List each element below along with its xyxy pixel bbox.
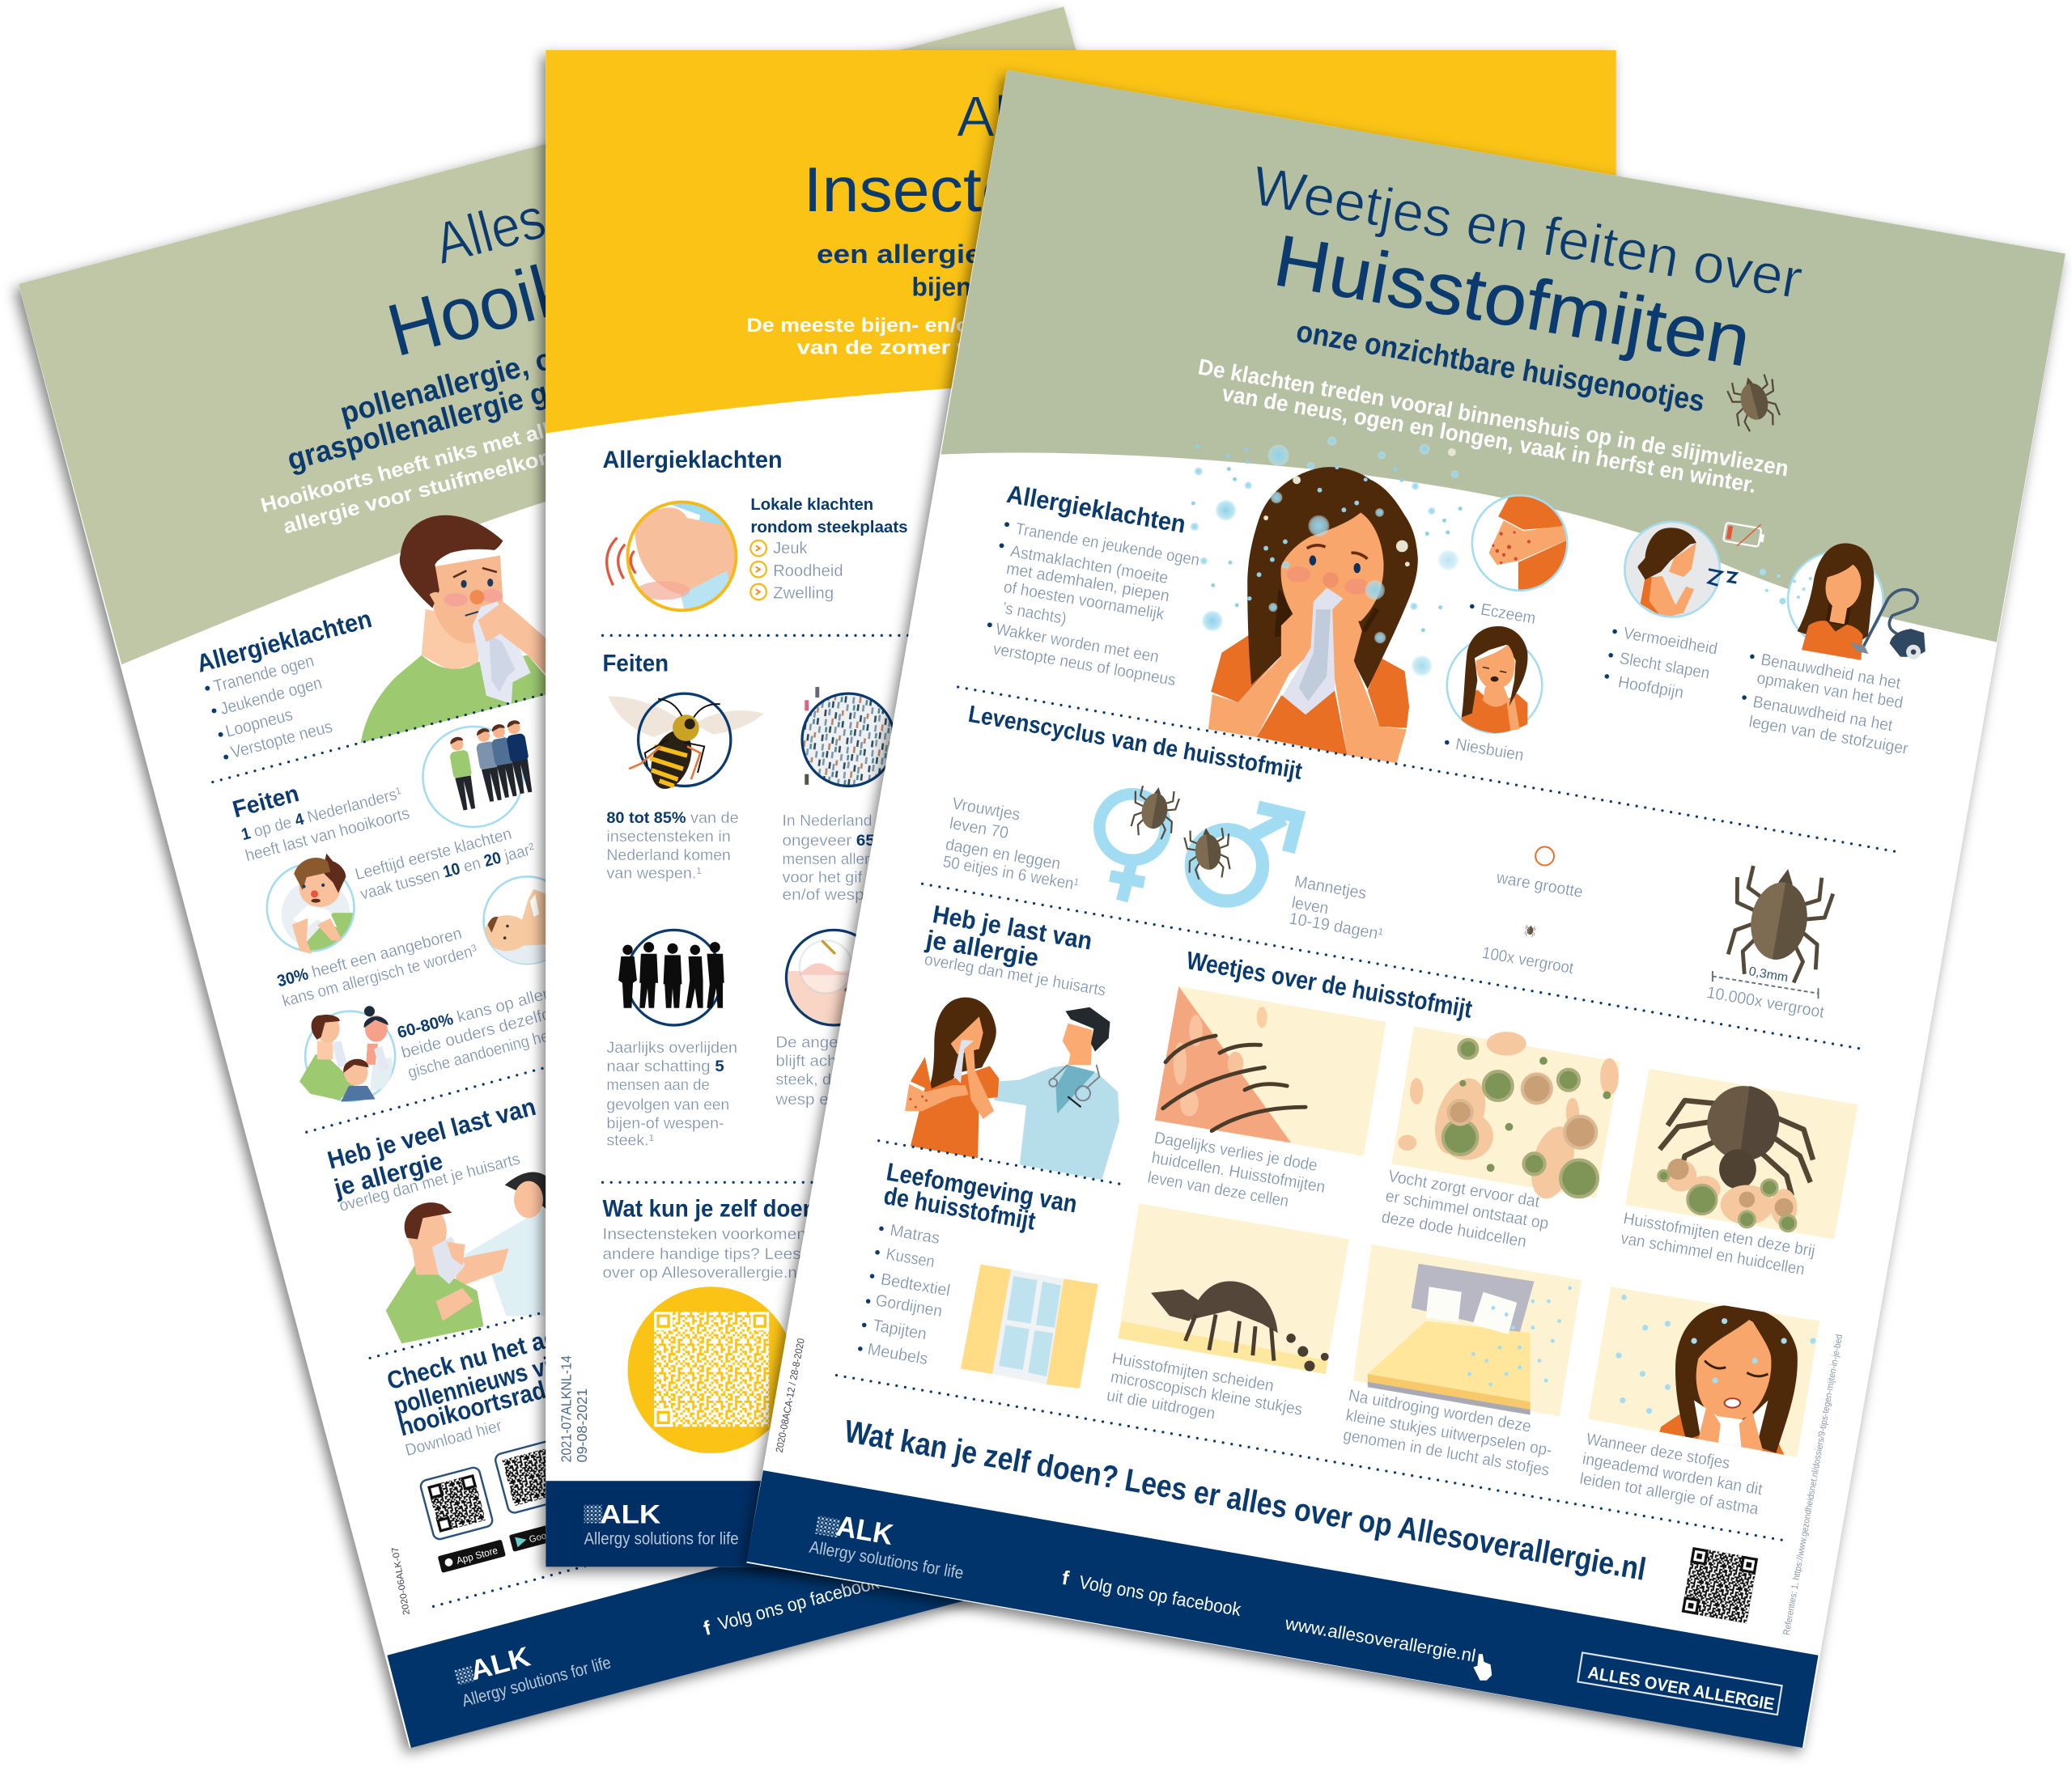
panel 5: bed (1353, 1244, 1582, 1416)
logo: ALK: Allergy solutions for life (808, 1538, 965, 1583)
call to action: Wat kan je zelf doen? Lees er alles over op Allesoverallergie.nl (842, 1414, 1649, 1588)
text: Jaarlijks overlijden: bijen-of wespen- (606, 1114, 724, 1132)
sage header with curved edge (940, 70, 2066, 642)
text: Jaarlijks overlijden: Jaarlijks overlijden (606, 1039, 737, 1057)
caption 3: Huisstofmijten eten deze brij (1622, 1210, 1816, 1261)
text: vrouwtjes: 50 eitjes in 6 weken¹ (941, 853, 1080, 894)
fact: 1 op de 4 (240, 719, 535, 865)
caption 5 (1342, 1387, 1553, 1480)
list: vermoeidheid: Hoofdpijn (1617, 673, 1685, 702)
heading: Weetjes over: Weetjes over de huisstofmijt (1184, 946, 1475, 1024)
icon: eczeem (1470, 494, 1569, 624)
size: 10.000x vergroot (1705, 861, 1836, 1022)
footer: facebook: f (701, 1617, 714, 1640)
heading: Check nu: Check nu het actuele (384, 1309, 611, 1395)
heading: Wat kun je zelf doen: Wat kun je zelf doen? (602, 1196, 830, 1223)
heading: Heb je last (923, 900, 1107, 1000)
heading: Heb je veel last: overleg dan met je huisarts (338, 1151, 522, 1215)
size: 100x vergroot: 100x vergroot (1480, 944, 1575, 977)
subtitle: een allergie voor het gif van (817, 239, 1213, 269)
heading: Leefomgeving: de huisstofmijt (881, 1181, 1038, 1236)
navy footer (746, 1470, 1819, 1748)
subtitle: pollenallergie, ook wel (337, 319, 642, 430)
poster sheet (546, 50, 1616, 1567)
text: Jaarlijks overlijden: naar schatting 5 (606, 1058, 724, 1075)
logo: ALK: ALK (600, 1499, 661, 1528)
fact: 60-80% (299, 973, 602, 1102)
fact: 60-80%: beide ouders dezelfde aller- (400, 992, 602, 1062)
text: vrouwtjes (941, 795, 1080, 894)
heading: Leefomgeving: Leefomgeving van (885, 1157, 1080, 1219)
text: Jaarlijks overlijden: mensen aan de (606, 1076, 710, 1094)
subtitle: bijen en wespen (912, 272, 1110, 302)
caption 6: leiden tot allergie of astma (1578, 1470, 1760, 1519)
list: benauwdheid: Benauwdheid na het (1760, 651, 1902, 693)
size: 100x vergroot (1480, 924, 1575, 977)
list: klachten: Tranende ogen (211, 651, 316, 696)
QR code (1682, 1547, 1758, 1623)
logo: ALK: Allergy solutions for life (460, 1653, 613, 1711)
list: benauwdheid: opmaken van het bed (1756, 669, 1904, 712)
icon: male symbol with mite (1184, 808, 1297, 901)
icon: vermoeidheid (1623, 520, 1736, 618)
list: vermoeidheid: Vermoeidheid (1622, 625, 1719, 659)
size: 10.000x vergroot: 0,3mm (1747, 965, 1789, 985)
icon: pointer hand (1473, 1654, 1492, 1681)
text: mannetjes: leven (1290, 894, 1330, 918)
caption 1 (1146, 1130, 1327, 1210)
icon: mite in title (1726, 371, 1784, 435)
text: mannetjes: 10-19 dagen¹ (1288, 909, 1385, 943)
fact: 60-80%: gische aandoening hebben (406, 1019, 583, 1082)
icon: five silhouettes (618, 930, 724, 1025)
badge: App Store (438, 1540, 506, 1573)
list: klachten: Astmaklachten (moeite (1008, 543, 1170, 587)
fact: 30% (277, 876, 546, 1007)
title (1248, 154, 1807, 382)
heading: Feiten: Feiten (602, 650, 669, 676)
QR code: app store (419, 1466, 494, 1541)
fact: leeftijd: vaak tussen 10 en 20 jaar² (359, 840, 537, 904)
navy footer band (387, 1378, 1455, 1748)
print code (558, 1355, 590, 1462)
panel: poster Hooikoorts (back) (7, 5, 1080, 1761)
text: Jaarlijks overlijden: steek.¹ (606, 1132, 655, 1150)
text: In Nederland (783, 812, 875, 904)
icon: niesbuien (1445, 626, 1542, 765)
caption 4: microscopisch kleine stukjes (1110, 1368, 1304, 1419)
list: lokale klachten (750, 496, 908, 603)
text: Insectensteken: andere handige tips? Lees er (602, 1245, 821, 1263)
footer: facebook: f (1060, 1567, 1071, 1590)
text: In Nederland: voor het gif v (783, 869, 875, 887)
text: De angel: steek, d (775, 1071, 831, 1088)
list: vermoeidheid (1605, 625, 1719, 702)
intro text: De meeste bijen- en/of wespensteken vinden plaats (746, 315, 1276, 337)
sage header with curved edge (19, 6, 1182, 664)
size: ware grootte: ware grootte (1494, 869, 1584, 901)
heading: Heb je last: overleg dan met je huisarts (923, 951, 1107, 1000)
badge: Alles over allergie: ALLES OVER ALLERGIE (1586, 1664, 1776, 1714)
particles (1191, 436, 1463, 676)
caption 2: Vocht zorgt ervoor dat (1386, 1168, 1541, 1211)
logo: ALK (584, 1499, 739, 1549)
list: leefomgeving (858, 1222, 952, 1368)
caption 2 (1380, 1168, 1550, 1251)
text: In Nederland: mensen aller (783, 850, 870, 868)
heading: Check nu: hooikoortsradar (396, 1370, 569, 1441)
logo: ALK: ALK (467, 1641, 533, 1686)
subtitle: onze onzichtbare huisgenootjes (1294, 314, 1707, 418)
list: lokale klachten: Jeuk (773, 540, 808, 558)
list: lokale klachten: Lokale klachten (750, 496, 873, 514)
text: De angel: blijft ach (775, 1053, 836, 1071)
list: klachten: of hoesten voornamelijk (1002, 579, 1166, 624)
heading: Heb je last: je allergie (923, 925, 1041, 973)
title: Huisstofmijten (1268, 220, 1756, 382)
illustration: window with curtains (961, 1264, 1098, 1389)
subtitle (817, 239, 1213, 302)
heading: Check nu (384, 1309, 611, 1460)
poster sheet (746, 70, 2066, 1748)
poster sheet (19, 6, 1455, 1748)
panel 3: mite eats (1625, 1069, 1858, 1239)
illustration: woman sneezing (1208, 467, 1418, 763)
panel 6: woman inhales (1588, 1287, 1819, 1460)
caption 5: Na uitdroging worden deze (1347, 1387, 1532, 1436)
heading: Check nu: pollennieuws via de (391, 1340, 596, 1420)
list: vermoeidheid: Slecht slapen (1618, 650, 1711, 683)
navy footer (546, 1481, 1616, 1567)
heading: Heb je veel last (325, 1092, 539, 1215)
list: leefomgeving: Bedtextiel (879, 1270, 952, 1300)
list: klachten: Loopneus (223, 706, 295, 741)
heading: Check nu: Download hier (403, 1417, 504, 1460)
logo: ALK: ALK (834, 1509, 896, 1551)
text: 80 tot 85%: insectensteken in (606, 828, 731, 846)
intro text: Hooikoorts heeft niks met allergie (258, 405, 603, 517)
text: De angel: wesp e (775, 1091, 829, 1109)
text: 80 tot 85%: van wespen.¹ (606, 865, 702, 883)
heading: Allergieklachten: Allergieklachten (1004, 480, 1188, 539)
icon: crowd (802, 687, 894, 786)
icon: eczeem: Eczeem (1480, 600, 1537, 628)
text: vrouwtjes: Vrouwtjes (951, 795, 1021, 825)
illustration: man and doctor (386, 1172, 546, 1343)
caption 1: leven van deze cellen (1146, 1168, 1290, 1210)
title (804, 84, 1272, 225)
caption 4: uit die uitdrogen (1106, 1387, 1216, 1423)
QR code: google play (494, 1439, 568, 1514)
icon: wasp (608, 693, 764, 795)
list: klachten: Wakker worden met een (995, 621, 1160, 667)
title: Weetjes en feiten over (1248, 154, 1807, 311)
icon: stinger under magnifier (785, 929, 856, 1027)
fact: 30%: 30% heeft een aangeboren (275, 925, 464, 990)
list: lokale klachten: Zwelling (773, 585, 834, 603)
title: Insectenallergie (804, 154, 1272, 225)
print code: 2020-08ACA-12 / 28-8-2020 (774, 1338, 807, 1454)
heading: Heb je veel last: je allergie (330, 1147, 446, 1202)
fact: 1 op de 4: 1 op de 4 Nederlanders¹ (240, 784, 404, 844)
list: klachten: met ademhalen, piepen (1005, 560, 1170, 605)
list: leefomgeving: Kussen (885, 1245, 936, 1271)
QR code on yellow circle (628, 1287, 794, 1453)
list: klachten: Verstopte neus (229, 718, 334, 762)
text: De angel: De angel (775, 1034, 842, 1052)
list: klachten: ’s nachts) (1001, 600, 1068, 628)
caption 4 (1106, 1350, 1304, 1423)
list: lokale klachten: rondom steekplaats (750, 519, 908, 536)
footer: website: www.allesoverallergie.nl (1283, 1613, 1477, 1666)
logo: ALK: Allergy solutions for life (584, 1530, 739, 1549)
list: benauwdheid (1742, 651, 1909, 758)
caption 2: deze dode huidcellen (1380, 1208, 1528, 1251)
panel 1: dode huidcellen (1155, 986, 1386, 1156)
text: Insectensteken (602, 1225, 830, 1282)
caption 5: genomen in de lucht als stofjes (1342, 1427, 1551, 1480)
caption 6 (1578, 1431, 1764, 1519)
intro text: van de neus, ogen en longen, vaak in herfst en winter. (1221, 380, 1758, 498)
caption 6: ingeademd worden kan dit (1581, 1450, 1764, 1499)
fact: leeftijd: Leeftijd eerste klachten (353, 825, 514, 884)
icon: niesbuien: Niesbuien (1454, 736, 1525, 765)
list: leefomgeving: Gordijnen (874, 1291, 944, 1321)
intro text: allergie voor stuifmeelkorrels (281, 436, 588, 538)
footer: facebook: Volg ons op facebook (1077, 1571, 1243, 1620)
caption 2: er schimmel ontstaat op (1384, 1187, 1550, 1233)
panel 4: uitdrogen (1118, 1203, 1349, 1374)
title: Hooikoorts (380, 204, 732, 372)
badge: App Store: App Store (455, 1545, 499, 1567)
panel 2: schimmel (1391, 1027, 1620, 1203)
print code: 2020-06ALK-07 (391, 1546, 412, 1616)
caption 6: Wanneer deze stofjes (1585, 1431, 1731, 1473)
intro text: De klachten treden vooral binnenshuis op in de slijmvliezen (1196, 354, 1790, 481)
icon: female symbol with mite (1099, 783, 1181, 901)
print code: 09-08-2021 (574, 1389, 590, 1462)
text: De angel (775, 1034, 842, 1109)
caption 1: huidcellen. Huisstofmijten (1150, 1149, 1327, 1197)
list: klachten (205, 651, 334, 762)
panel: poster Huisstofmijten (front) (746, 70, 2066, 1748)
text: Insectensteken: Insectensteken voorkomen en (602, 1225, 830, 1243)
icon: sting on arm (605, 500, 738, 612)
icon: woman breathless with vacuum cleaner (1760, 537, 1926, 660)
fact: 1 op de 4: heeft last van hooikoorts (244, 804, 412, 865)
fact: 60-80%: 60-80% kans op allergie als (396, 973, 597, 1042)
text: In Nederland: ongeveer 65 (783, 832, 875, 850)
caption 4: Huisstofmijten scheiden (1110, 1350, 1275, 1395)
text: Insectensteken: over op Allesoverallergie.nl (602, 1264, 800, 1282)
icon: zz (1709, 570, 1736, 585)
panel: poster Insectenallergie (middle) (546, 50, 1616, 1567)
heading: Allergieklachten: Allergieklachten (193, 604, 375, 678)
footer: facebook: Volg ons op facebook (715, 1571, 881, 1634)
size: ware grootte (1494, 847, 1584, 901)
caption 3: van schimmel en huidcellen (1620, 1230, 1806, 1279)
text: mannetjes (1288, 873, 1385, 943)
list: lokale klachten: Roodheid (773, 562, 843, 580)
badge: Google Play (509, 1517, 580, 1552)
text: mannetjes: Mannetjes (1293, 873, 1368, 903)
yellow header (546, 50, 1616, 434)
illustration: woman and doctor (905, 998, 1119, 1180)
list: benauwdheid: legen van de stofzuiger (1747, 713, 1909, 758)
text: In Nederland: In Nederland (783, 812, 873, 829)
print code: 2021-07ALKNL-14 (558, 1355, 574, 1462)
text: 80 tot 85%: Nederland komen (606, 846, 731, 864)
list: klachten: verstopte neus of loopneus (991, 640, 1177, 689)
heading: Feiten: Feiten (230, 780, 302, 823)
caption 1: Dagelijks verlies je dode (1153, 1130, 1318, 1175)
badge: Google Play: Google Play (529, 1523, 580, 1545)
text: Jaarlijks overlijden (606, 1039, 737, 1150)
subtitle: graspollenallergie genoemd (283, 347, 656, 477)
heading: Allergieklachten: Allergieklachten (602, 447, 783, 473)
size: 10.000x vergroot: 10.000x vergroot (1705, 984, 1826, 1022)
title: Alles (428, 185, 552, 277)
list: leefomgeving: Matras (889, 1222, 941, 1248)
list: klachten: Jeukende ogen (219, 674, 324, 719)
list: klachten: Tranende en jeukende ogen (1014, 520, 1201, 570)
list: klachten (987, 520, 1201, 689)
list: leefomgeving: Meubels (866, 1341, 929, 1368)
references: Referenties: 1. https://www.gezondheidsnet.nl/dossiers/9-tips-tegen-mijten-in-je-bed (1782, 1333, 1845, 1636)
list: leefomgeving: Tapijten (872, 1316, 928, 1343)
title: Alles over (957, 84, 1206, 148)
logo: ALK (808, 1509, 965, 1583)
intro text: van de zomer wanneer het warm is (796, 337, 1193, 359)
text: In Nederland: en/of wesp (783, 886, 864, 904)
text: Jaarlijks overlijden: gevolgen van een (606, 1096, 729, 1113)
list: benauwdheid: Benauwdheid na het (1751, 693, 1894, 735)
intro text (746, 315, 1276, 359)
text: 80 tot 85%: 80 tot 85% van de (606, 809, 739, 827)
fact: 30%: kans om allergisch te worden³ (281, 942, 479, 1011)
caption 5: kleine stukjes uitwerpselen op- (1344, 1406, 1553, 1460)
text: vrouwtjes: dagen en leggen (944, 836, 1062, 873)
heading: Levenscyclus: Levenscyclus van de huisstofmijt (966, 701, 1305, 785)
text: 80 tot 85% (606, 809, 739, 883)
illustration: man with tissue (361, 515, 546, 743)
heading: Heb je veel last: Heb je veel last van (325, 1092, 539, 1175)
fact: leeftijd (267, 825, 537, 954)
icon: empty battery (1722, 519, 1766, 550)
text: vrouwtjes: leven 70 (948, 815, 1010, 842)
heading: Heb je last: Heb je last van (931, 900, 1094, 956)
